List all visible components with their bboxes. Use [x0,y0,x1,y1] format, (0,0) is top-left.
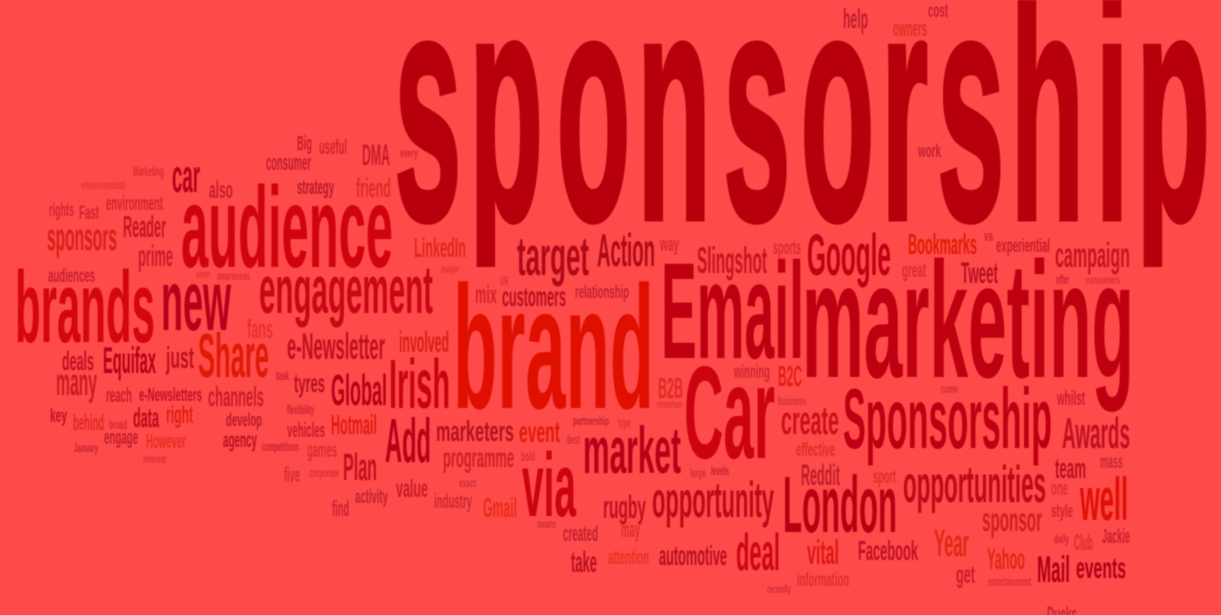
word cloud: market [583,413,681,487]
word cloud: Gmail [483,492,517,523]
word: corporate: corporate [309,466,339,480]
word cloud: B2C [778,361,802,393]
word: event: event [519,416,560,449]
word: get: get [956,561,975,589]
word cloud: strategy [297,177,334,199]
word: marketers: marketers [436,416,514,448]
word cloud: levels [711,463,729,478]
word cloud: created [563,521,598,546]
word cloud: tyres [294,368,325,398]
word cloud: environment [106,193,163,215]
word cloud: mass [1100,452,1123,473]
word cloud: vital [807,534,839,572]
word: experiential: experiential [996,236,1050,257]
word: consumers: consumers [1086,273,1120,287]
word: daily: daily [1054,532,1069,546]
word cloud: also [209,177,233,204]
word: revenue: revenue [657,397,682,411]
word: effective: effective [796,440,835,461]
word cloud: DMA [362,139,390,172]
word cloud: Big [297,133,312,155]
word cloud: customers [502,281,566,312]
word: cost: cost [928,1,948,22]
word: audiences: audiences [48,266,95,287]
word cloud: Awards [1062,409,1130,458]
word cloud: Action [597,224,655,276]
word cloud: create [781,399,839,443]
word cloud: attention [608,547,649,569]
word cloud: Plan [343,447,377,489]
word cloud: owners [893,16,927,41]
word: major: major [441,262,459,276]
word cloud: Tweet [961,257,998,290]
word cloud: B2B [658,373,683,405]
word cloud: Share [198,322,269,391]
word cloud: Yahoo [987,543,1025,576]
word: winning: winning [733,362,770,383]
word: come: come [941,382,958,396]
word cloud: Add [385,407,431,476]
word cloud: programme [443,442,514,473]
word cloud: prime [138,240,173,273]
word: work: work [917,141,942,161]
word cloud: flexibility [287,402,314,417]
word: Fast: Fast [79,203,99,224]
word cloud: best [567,432,580,447]
word cloud: well [1080,466,1128,533]
word cloud: take [571,546,597,579]
word: large: large [690,466,706,480]
word cloud: Facebook [858,535,918,566]
word cloud: engagement [259,252,433,328]
word cloud: Equifax [103,340,156,381]
word cloud: car [172,150,200,202]
word cloud: help [843,3,868,34]
word cloud: new [161,254,231,349]
word: recently: recently [767,582,791,596]
word cloud: Car [684,339,775,486]
word cloud: brands [15,252,155,364]
word cloud: may [621,517,640,542]
word cloud: target [517,225,589,287]
word cloud: Jackie [1102,526,1130,548]
word: business: business [778,394,806,408]
word: vs: vs [984,228,993,245]
word: interest: interest [143,452,166,466]
word: entertainment: entertainment [988,574,1031,589]
word cloud: fans [247,314,273,344]
word: events: events [1076,552,1126,585]
word cloud: sports [773,238,801,259]
word: partnership: partnership [573,414,609,428]
word cloud: campaign [1055,236,1130,275]
word cloud: type [618,415,631,430]
word cloud: However [146,431,186,453]
word cloud: deals [62,346,94,376]
word: activity: activity [355,487,388,508]
word cloud: consumer [266,150,311,175]
word cloud: broad [109,417,127,432]
word: way: way [659,234,679,256]
word cloud: Irish [389,345,450,423]
word cloud: UK [500,273,509,288]
word: awareness: awareness [217,269,250,283]
word cloud: Mail [1037,549,1070,590]
word: value: value [396,475,428,503]
word: exact: exact [459,476,476,490]
word cloud: Bookmarks [908,229,977,261]
word cloud: useful [319,136,347,159]
word cloud: right [166,401,193,429]
word cloud: Reader [123,209,166,244]
word cloud: Slingshot [697,240,767,281]
word cloud: team [1055,453,1086,485]
word cloud: sponsor [982,501,1042,538]
word cloud: sport [873,467,896,488]
word cloud: information [797,570,849,591]
word cloud: Marketing [133,163,164,179]
word cloud: audience [181,164,393,292]
word cloud: great [902,260,926,282]
word: e-Newsletters: e-Newsletters [139,385,202,405]
word cloud: rugby [603,489,646,525]
word cloud: Hotmail [331,409,377,440]
word cloud: automotive [659,540,727,571]
word cloud: deal [736,524,780,582]
word cloud: involved [399,326,449,359]
word cloud: behind [73,410,104,435]
word cloud: many [56,362,97,404]
word: style: style [1051,501,1073,521]
word: seen: seen [196,267,210,281]
word cloud: Year [934,523,969,565]
word cloud: e-Newsletter [287,326,385,367]
word cloud: Global [331,366,387,415]
word cloud: opportunity [652,472,774,528]
word cloud: five [284,464,300,487]
word: develop: develop [226,410,262,430]
word cloud: friend [356,173,391,203]
word: just: just [165,340,194,375]
word cloud: engage [104,427,138,449]
word cloud: Club [1074,530,1093,555]
word: relationship: relationship [575,282,629,302]
word cloud: Google [807,223,891,288]
word cloud: brand [453,251,654,446]
word: environmental: environmental [81,178,125,192]
word cloud: competitions [262,439,299,454]
word cloud: London [783,460,897,549]
word cloud: via [522,436,576,536]
word cloud: vehicles [287,420,325,442]
word: January: January [74,441,98,455]
word cloud: find [332,496,349,521]
word cloud: agency [223,429,257,452]
word cloud: rights [49,200,74,220]
word cloud: LinkedIn [414,232,466,263]
word cloud: data [133,402,159,433]
word: means: means [537,517,556,531]
word: every: every [400,146,418,160]
word cloud: one [1051,478,1068,500]
word cloud: reach [106,385,132,407]
word: key: key [50,406,67,427]
word cloud: Email [661,235,804,388]
word cloud: offer [1056,272,1069,287]
word cloud: industry [434,491,472,513]
word cloud: games [307,439,337,462]
word cloud: bold [521,448,535,464]
word cloud: Reddit [801,459,840,492]
word: task: task [276,368,289,383]
word: mix: mix [475,281,497,309]
word cloud: channels [208,381,264,412]
word cloud: whilst [1057,388,1085,410]
word cloud: sponsors [47,217,117,259]
